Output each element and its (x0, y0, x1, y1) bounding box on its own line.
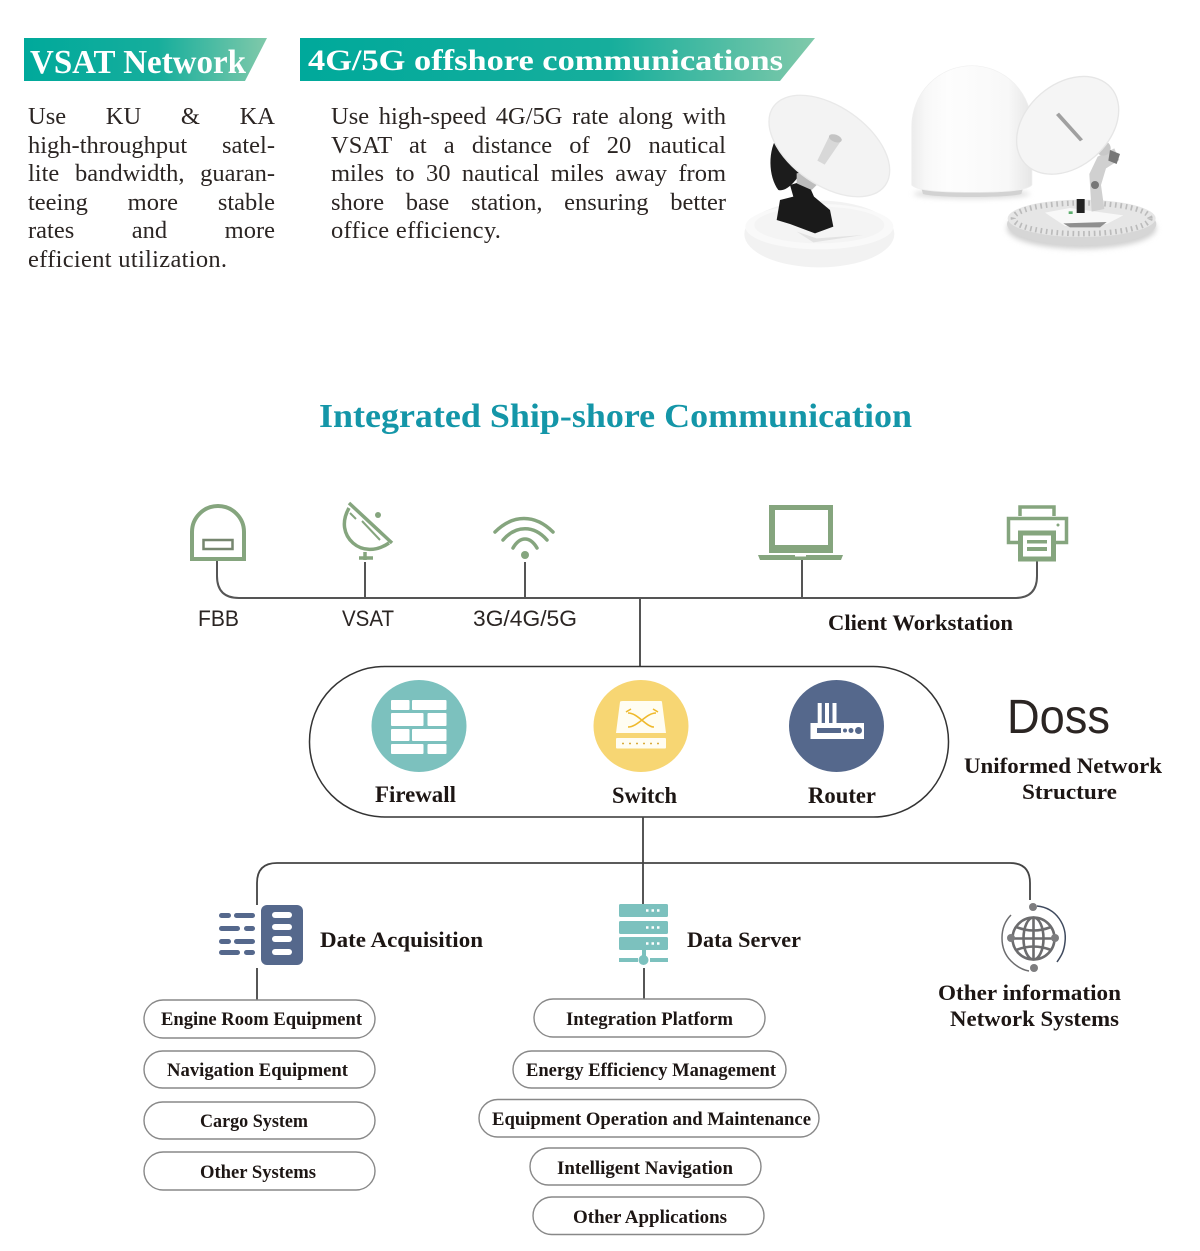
label: Uniformed Network Structure: Uniformed Network (964, 753, 1162, 778)
item: Other Applications: Other Applications (573, 1207, 727, 1228)
label: Uniformed Network Structure (964, 753, 1162, 804)
text block: VSAT description: lite bandwidth, guaran- (28, 160, 275, 187)
label: 3G/4G/5G: 3G/4G/5G (473, 606, 577, 631)
icon: router (789, 680, 884, 772)
icon: VSAT dish (344, 503, 392, 560)
item: Cargo System: Cargo System (200, 1111, 308, 1132)
label: Client Workstation: Client Workstation (828, 610, 1013, 635)
left antenna (744, 75, 908, 267)
heading: Integrated Ship-shore Communication: Integrated Ship-shore Communication (319, 398, 912, 435)
item: Other Systems: Other Systems (200, 1162, 316, 1183)
item: Energy Efficiency Management (513, 1051, 786, 1088)
brand: Doss: Doss (1007, 691, 1110, 744)
list: date acquisition items (144, 1000, 375, 1190)
icon: wireless signal (495, 518, 553, 559)
item: Navigation Equipment (144, 1051, 375, 1088)
item: Integration Platform: Integration Platform (566, 1009, 733, 1030)
right antenna (997, 57, 1156, 249)
panel: Doss network core (310, 666, 948, 817)
banner: VSAT Network: VSAT Network (30, 44, 246, 81)
item: Integration Platform (534, 999, 765, 1037)
item: Engine Room Equipment: Engine Room Equipment (161, 1009, 363, 1030)
icon: printer (1008, 507, 1066, 559)
item: Navigation Equipment: Navigation Equipment (167, 1060, 349, 1081)
label: Router: Router (808, 783, 876, 809)
icon: date acquisition (219, 905, 303, 965)
text block: 4G/5G description (331, 103, 726, 244)
text block: VSAT description: high-throughput satel- (28, 132, 275, 158)
text block: 4G/5G description: miles to 30 nautical miles away from (331, 160, 726, 187)
label: FBB: FBB (198, 606, 239, 631)
icon: globe network (1002, 903, 1065, 972)
dome radome (912, 66, 1032, 199)
item: Engine Room Equipment (144, 1000, 375, 1038)
icon: laptop (758, 505, 843, 560)
text block: 4G/5G description: office efficiency. (331, 217, 501, 244)
text block: VSAT description (28, 103, 275, 272)
item: Energy Efficiency Management: Energy Efficiency Management (526, 1060, 777, 1081)
product photos: satellite antennas (744, 57, 1156, 267)
label: VSAT: VSAT (342, 606, 394, 631)
item: Cargo System (144, 1102, 375, 1139)
label: Data Server: Data Server (687, 927, 801, 952)
text block: VSAT description: efficient utilization. (28, 246, 227, 272)
label: Other information Network Systems: Network Systems (950, 1006, 1119, 1031)
item: Equipment Operation and Maintenance: Equipment Operation and Maintenance (492, 1109, 811, 1130)
text block: 4G/5G description: Use high-speed 4G/5G rate along with (331, 103, 726, 130)
connector: lower bus (257, 817, 1030, 1000)
label: Uniformed Network Structure: Structure (1022, 779, 1117, 804)
label: Switch: Switch (612, 783, 677, 809)
list: data server items (479, 999, 819, 1234)
item: Other Systems (144, 1152, 375, 1190)
item: Equipment Operation and Maintenance (479, 1100, 819, 1137)
connector: upper bus (217, 560, 1037, 666)
item: Intelligent Navigation (530, 1148, 761, 1185)
icon: switch (594, 680, 688, 772)
text block: VSAT description: teeing more stable (28, 188, 275, 216)
label: Other information Network Systems (938, 980, 1121, 1031)
label: Other information Network Systems: Other information (938, 980, 1121, 1005)
text block: 4G/5G description: shore base station, ensuring better (331, 188, 726, 216)
label: Firewall: Firewall (375, 782, 456, 808)
icon: firewall (372, 680, 466, 772)
item: Intelligent Navigation: Intelligent Navigation (557, 1158, 733, 1179)
banner: 4G/5G offshore communications: 4G/5G offshore communications (308, 44, 783, 77)
icon: FBB dome (192, 506, 244, 559)
banner: 4G/5G offshore communications (300, 38, 815, 81)
text block: VSAT description: Use KU & KA (28, 103, 275, 130)
icon: data server (619, 904, 668, 965)
label: Date Acquisition: Date Acquisition (320, 927, 483, 952)
text block: 4G/5G description: VSAT at a distance of 20 nautical (331, 132, 726, 158)
item: Other Applications (533, 1197, 764, 1234)
text block: VSAT description: rates and more (28, 217, 275, 244)
